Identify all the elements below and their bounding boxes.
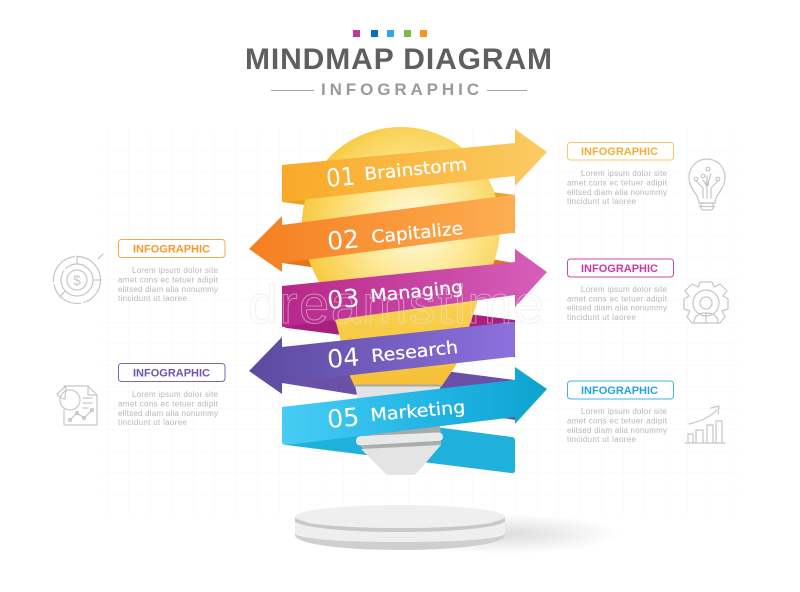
callout: bottom right: INFOGRAPHIC bbox=[581, 385, 658, 397]
callout: upper left: amet cons ec tetuer adipit bbox=[118, 276, 219, 284]
callout: lower left bbox=[118, 364, 225, 427]
ribbon 04 Research bbox=[249, 322, 515, 394]
ribbon 01 Brainstorm: Brainstorm bbox=[364, 155, 468, 185]
icon: circuit bulb bbox=[689, 159, 725, 210]
callout: bottom right: tincidunt ut laoree bbox=[567, 435, 637, 444]
callout: lower left: elitsed diam alia nonummy bbox=[118, 409, 218, 418]
ribbon 05 Marketing: Marketing bbox=[370, 398, 466, 426]
callout: middle right: Lorem ipsum dolor site bbox=[581, 285, 668, 294]
icon: dollar target bbox=[54, 254, 103, 304]
icon: growth chart bbox=[685, 406, 725, 443]
callout: lower left: amet cons ec tetuer adipit bbox=[118, 400, 219, 408]
podium bbox=[295, 505, 620, 554]
ribbon 02 Capitalize: 02 bbox=[326, 224, 360, 256]
callout: bottom right: elitsed diam alia nonummy bbox=[567, 426, 667, 435]
callout: lower left: tincidunt ut laoree bbox=[118, 418, 188, 427]
callout: upper left: tincidunt ut laoree bbox=[118, 294, 188, 303]
ribbon 04 Research: Research bbox=[370, 338, 459, 367]
ribbon 03 Managing: 03 bbox=[326, 283, 360, 315]
colour squares bbox=[353, 30, 427, 37]
callout: lower left: Lorem ipsum dolor site bbox=[132, 390, 219, 399]
icon: gear with person bbox=[684, 282, 728, 323]
callout: middle right: tincidunt ut laoree bbox=[567, 313, 637, 322]
callout: bottom right: Lorem ipsum dolor site bbox=[581, 407, 668, 416]
ribbon 01 Brainstorm bbox=[282, 129, 547, 202]
bulb base bottom bbox=[356, 422, 443, 475]
ribbon 04 Research: 04 bbox=[326, 342, 360, 374]
light bulb glass bbox=[302, 127, 500, 387]
callout: top right: Lorem ipsum dolor site bbox=[581, 169, 668, 178]
callout: top right: INFOGRAPHIC bbox=[581, 146, 658, 158]
ribbon 02 Capitalize bbox=[249, 195, 515, 272]
callout: lower left: INFOGRAPHIC bbox=[133, 368, 210, 380]
callout: top right bbox=[567, 142, 674, 206]
ribbon 03 Managing: Managing bbox=[369, 278, 464, 307]
ribbon 02 Capitalize: Capitalize bbox=[371, 219, 464, 248]
callout: upper left: INFOGRAPHIC bbox=[133, 244, 210, 256]
callout: upper left: Lorem ipsum dolor site bbox=[132, 266, 219, 275]
callout: middle right bbox=[567, 259, 674, 322]
ribbon 01 Brainstorm: 01 bbox=[325, 162, 356, 193]
callout: middle right: elitsed diam alia nonummy bbox=[567, 304, 667, 312]
bulb base top bbox=[355, 385, 441, 400]
callout: top right: tincidunt ut laoree bbox=[567, 197, 637, 206]
icon: report bbox=[57, 386, 97, 425]
callout: middle right: amet cons ec tetuer adipit bbox=[567, 294, 668, 304]
ribbon back folds bbox=[282, 165, 515, 473]
title: MINDMAP DIAGRAM bbox=[245, 43, 552, 76]
callout: bottom right bbox=[567, 381, 674, 444]
subtitle: INFOGRAPHIC bbox=[321, 80, 479, 99]
callout: upper left: elitsed diam alia nonummy bbox=[118, 285, 218, 294]
callout: middle right: INFOGRAPHIC bbox=[581, 263, 658, 275]
icon: dollar target: $ bbox=[73, 272, 81, 288]
callout: bottom right: amet cons ec tetuer adipit bbox=[567, 416, 668, 426]
ribbon 05 Marketing: 05 bbox=[326, 402, 360, 434]
ribbon 03 Managing bbox=[282, 249, 547, 327]
watermark: dreamstime bbox=[248, 275, 544, 335]
callout: top right: elitsed diam alia nonummy bbox=[567, 188, 667, 197]
callout: upper left bbox=[118, 240, 225, 303]
callout: top right: amet cons ec tetuer adipit bbox=[567, 178, 668, 188]
ribbon 05 Marketing bbox=[282, 367, 547, 445]
bulb neck bbox=[335, 303, 477, 387]
